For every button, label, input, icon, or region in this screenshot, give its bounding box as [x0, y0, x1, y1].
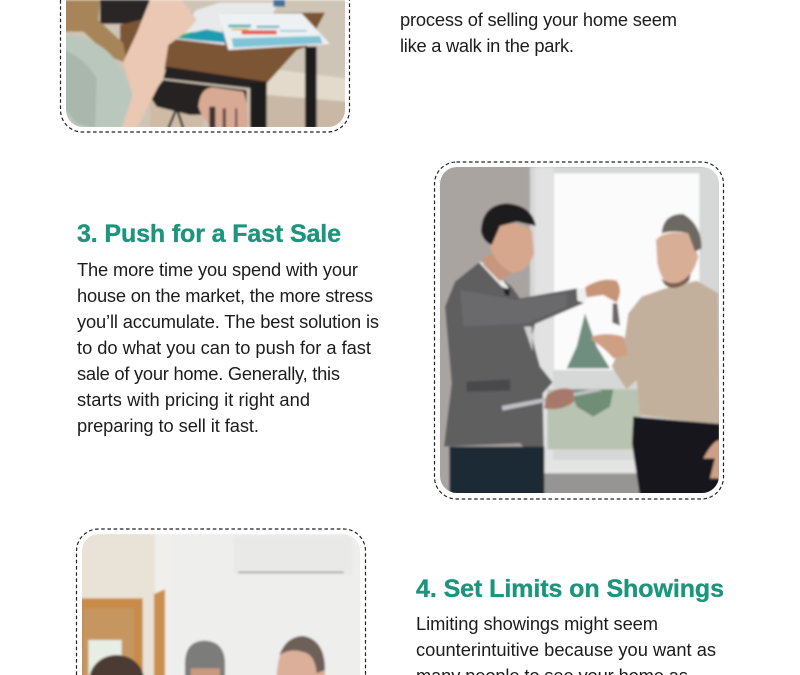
text block: step 3 body: house on the market, the more stress — [77, 285, 373, 306]
step 4 heading: 4. Set Limits on Showings — [416, 575, 724, 603]
icon: hand under table — [198, 87, 248, 128]
person in foreground — [66, 0, 126, 62]
panel: photo of agent handing over keys — [434, 162, 724, 499]
keys — [612, 303, 620, 326]
air conditioner — [233, 536, 353, 575]
text block: step 3 body: preparing to sell it fast. — [77, 415, 259, 436]
three heads — [89, 655, 144, 675]
text block: step 3 body: starts with pricing it right and — [77, 389, 310, 410]
text block: closing lines of step 2 — [400, 9, 677, 56]
icon: wooden table — [120, 13, 325, 83]
man in grey suit — [444, 262, 583, 455]
clipboard — [502, 389, 603, 411]
icon: papers — [168, 3, 278, 45]
text block: closing lines of step 2: like a walk in the park. — [400, 35, 574, 56]
text block: closing lines of step 2: process of selling your home seem — [400, 9, 677, 30]
step 3 heading: 3. Push for a Fast Sale — [77, 220, 341, 248]
text block: step 3 body — [77, 259, 379, 436]
text block: step 3 body: sale of your home. Generally, this — [77, 363, 340, 384]
text block: step 3 body: to do what you can to push for a fast — [77, 337, 371, 358]
panel: photo of desk with documents — [60, 0, 350, 132]
window — [528, 167, 719, 461]
text block: step 4 body — [416, 613, 716, 675]
text block: step 4 body: Limiting showings might seem — [416, 613, 658, 634]
door — [80, 598, 143, 675]
man in beige sweater — [612, 281, 720, 425]
text block: step 3 body: The more time you spend with your — [77, 259, 358, 280]
text block: step 3 body: you’ll accumulate. The best solution is — [77, 311, 379, 332]
text block: step 4 body: counterintuitive because you want as — [416, 639, 716, 660]
panel: photo of three people in a bright room — [76, 529, 366, 675]
